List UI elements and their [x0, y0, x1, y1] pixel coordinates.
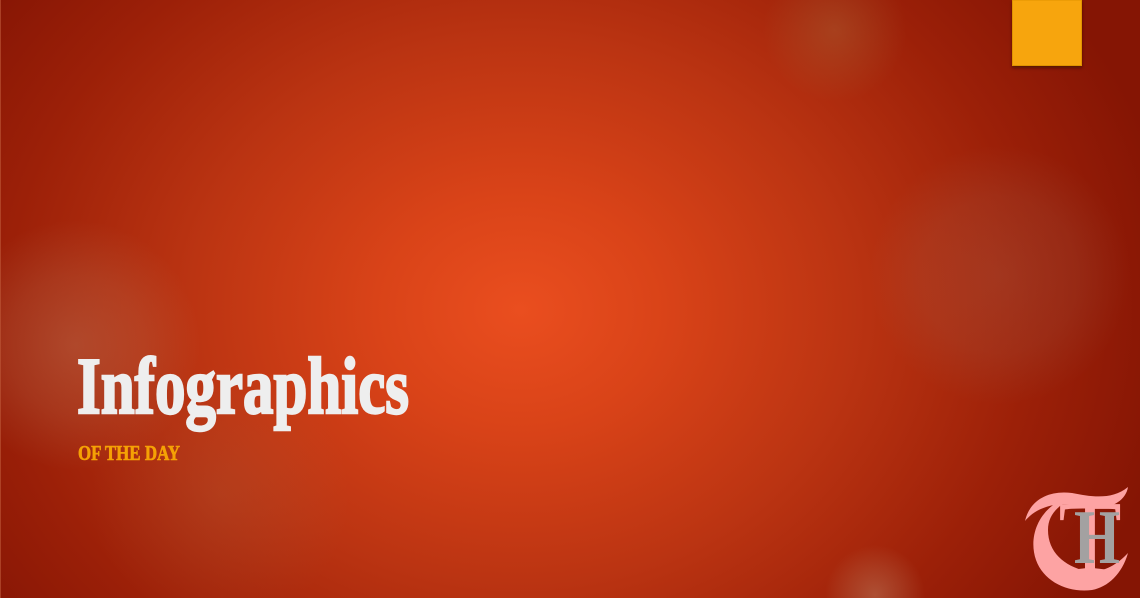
logo: T and H monogram — [1025, 480, 1128, 595]
logo letter H: H — [1074, 494, 1120, 580]
title: Infographics — [77, 343, 409, 431]
logo curve — [1033, 503, 1128, 590]
subtitle: OF THE DAY — [78, 441, 180, 465]
logo swash — [1025, 487, 1128, 521]
accent tab: orange rectangle — [1012, 0, 1082, 66]
logo letter T: T — [1058, 480, 1122, 595]
logo stem — [1085, 560, 1095, 589]
